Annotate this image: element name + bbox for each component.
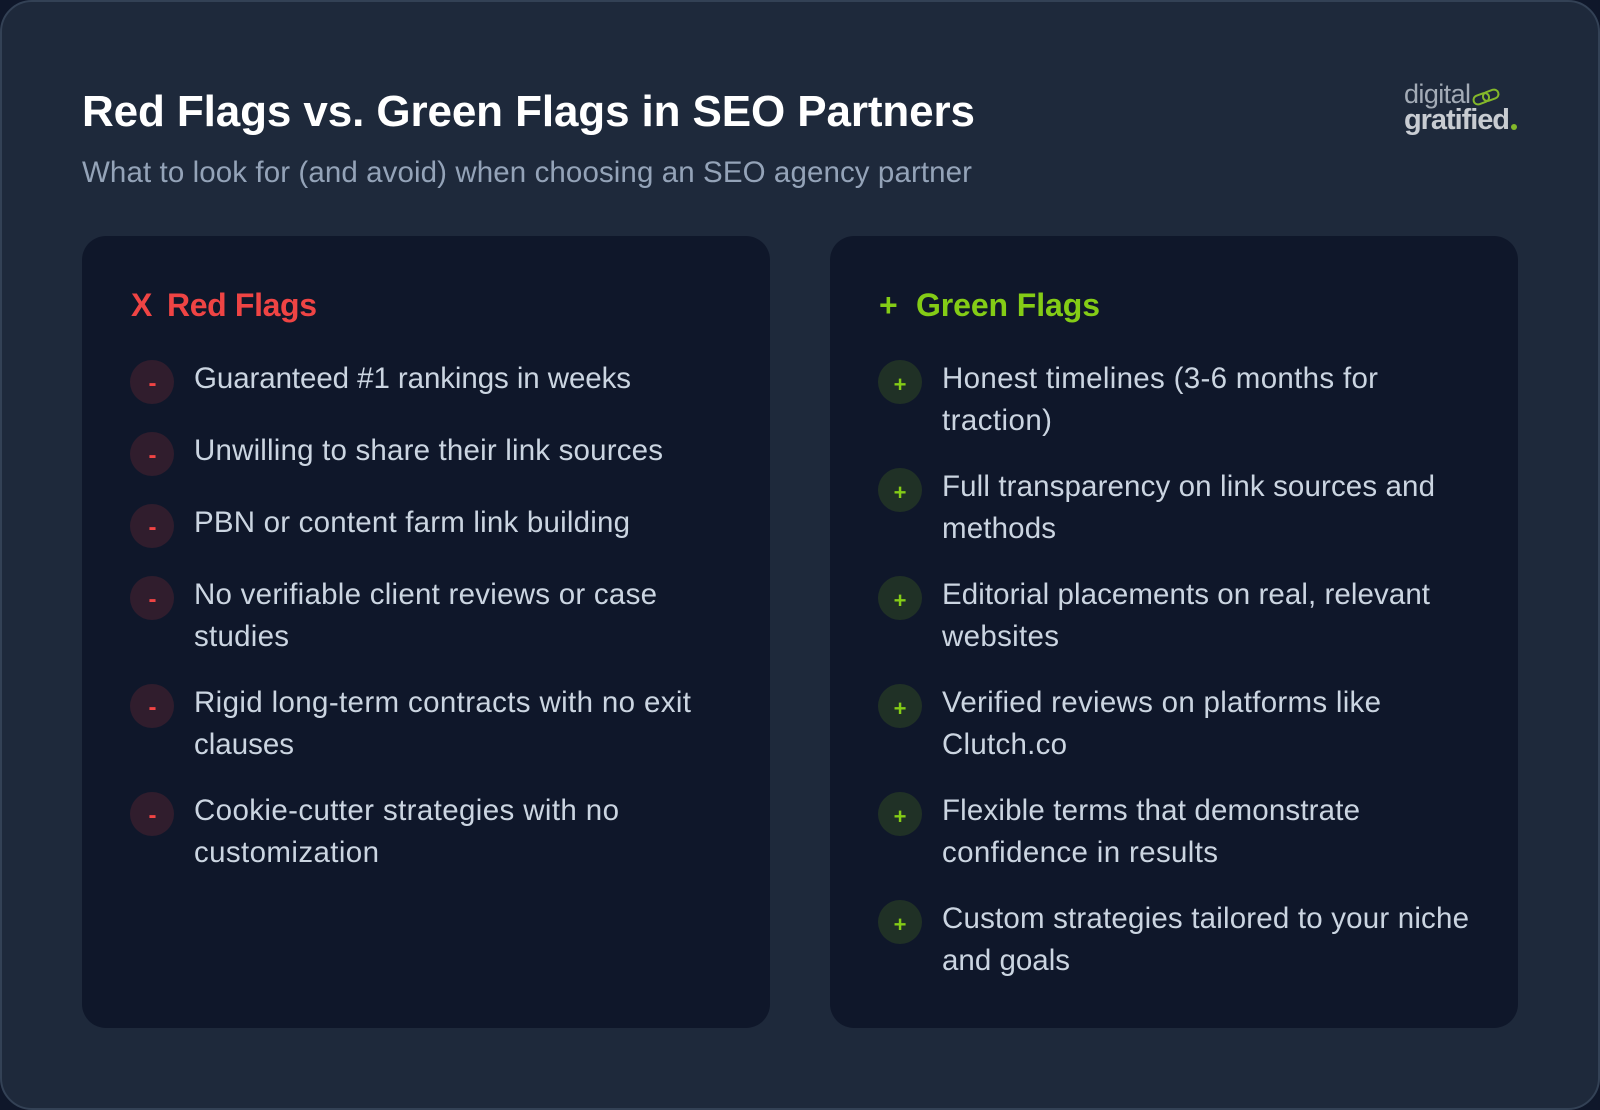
list item: reviews [130, 576, 657, 653]
list item: editorial placements: + [894, 588, 906, 613]
list item: custom strategies [878, 900, 1469, 977]
list item: verified reviews: Clutch.co [942, 728, 1067, 761]
list item: editorial placements: Editorial placements on real, relevant [942, 578, 1430, 611]
list item: verified reviews: + [894, 696, 906, 721]
list item: editorial placements [878, 576, 1430, 653]
list item: link sources: Unwilling to share their link sources [194, 434, 663, 467]
list item: reviews: No verifiable client reviews or case [194, 578, 657, 611]
list item: honest timelines: traction) [942, 404, 1052, 437]
list item: PBN [130, 504, 630, 548]
list item: contracts: Rigid long-term contracts with no exit [194, 686, 691, 719]
list item: cookie-cutter: customization [194, 836, 379, 869]
list item: custom strategies: and goals [942, 944, 1070, 977]
list item: guaranteed rankings: Guaranteed #1 rankings in weeks [194, 362, 631, 395]
list item: editorial placements: websites [941, 620, 1059, 653]
list item: reviews: studies [194, 620, 289, 653]
list item: custom strategies: + [894, 912, 906, 937]
list item: honest timelines: + [894, 372, 906, 397]
heading: green flags: + [879, 287, 898, 323]
list item: verified reviews: Verified reviews on platforms like [942, 686, 1381, 719]
list item: flexible terms [878, 792, 1360, 869]
list item: cookie-cutter: Cookie-cutter strategies with no [194, 794, 619, 827]
list item: cookie-cutter [130, 792, 619, 869]
heading: red flags: Red Flags [167, 287, 317, 323]
title: Red Flags vs. Green Flags in SEO Partners [82, 87, 975, 136]
list item: transparency: + [894, 480, 906, 505]
panel: red flags [82, 236, 770, 1028]
list item: link sources: - [148, 442, 156, 469]
list item: reviews: - [148, 586, 156, 613]
list item: transparency: Full transparency on link sources and [942, 470, 1435, 503]
logo: digital gratified [1404, 79, 1517, 136]
list item: honest timelines: Honest timelines (3-6 months for [942, 362, 1378, 395]
list item: PBN: - [148, 514, 156, 541]
list item: contracts: clauses [194, 728, 294, 761]
list item: link sources [130, 432, 663, 476]
list item: flexible terms: Flexible terms that demonstrate [942, 794, 1360, 827]
list item: custom strategies: Custom strategies tailored to your niche [942, 902, 1469, 935]
logo: digital gratified: gratified [1404, 104, 1510, 136]
list item: transparency: methods [942, 512, 1056, 545]
list item: contracts: - [148, 694, 156, 721]
list item: guaranteed rankings: - [148, 370, 156, 397]
heading: red flags: X [131, 287, 153, 323]
list item: flexible terms: confidence in results [942, 836, 1218, 869]
list item: PBN: PBN or content farm link building [194, 506, 630, 539]
list item: contracts [130, 684, 691, 761]
heading: green flags: Green Flags [916, 287, 1100, 323]
list item: honest timelines [878, 360, 1378, 437]
list item: verified reviews [878, 684, 1381, 761]
list item: flexible terms: + [894, 804, 906, 829]
list item: guaranteed rankings [130, 360, 631, 404]
subtitle: What to look for (and avoid) when choosing an SEO agency partner [82, 156, 972, 189]
list item: cookie-cutter: - [148, 802, 156, 829]
panel: green flags [830, 236, 1518, 1028]
logo: digital gratified: digital [1404, 79, 1471, 109]
list item: transparency [878, 468, 1435, 545]
